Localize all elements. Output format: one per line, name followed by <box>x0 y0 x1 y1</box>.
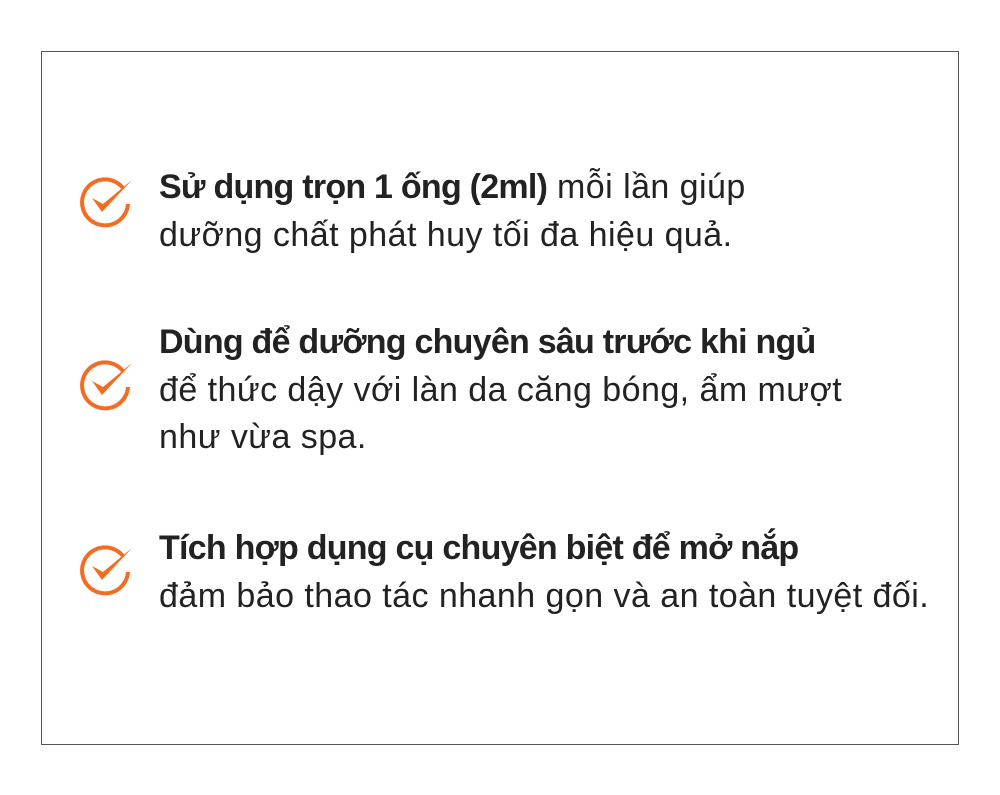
text block 1 <box>159 168 746 254</box>
text block 2 <box>159 323 842 456</box>
icon: check 2 <box>80 360 132 410</box>
text block 1: Sử dụng trọn 1 ống (2ml) mỗi lần giúp <box>159 168 746 206</box>
text block 2: như vừa spa. <box>159 418 367 456</box>
text block 1: dưỡng chất phát huy tối đa hiệu quả. <box>159 216 733 254</box>
text block 2: để thức dậy với làn da căng bóng, ẩm mượt <box>159 370 842 408</box>
text block 3: đảm bảo thao tác nhanh gọn và an toàn tuyệt đối. <box>159 576 929 614</box>
icon: check 3 <box>80 545 132 596</box>
icon: check 1 <box>80 177 132 228</box>
text block 3 <box>159 528 929 614</box>
text block 3: Tích hợp dụng cụ chuyên biệt để mở nắp <box>159 529 798 567</box>
text block 2: Dùng để dưỡng chuyên sâu trước khi ngủ <box>159 323 816 361</box>
